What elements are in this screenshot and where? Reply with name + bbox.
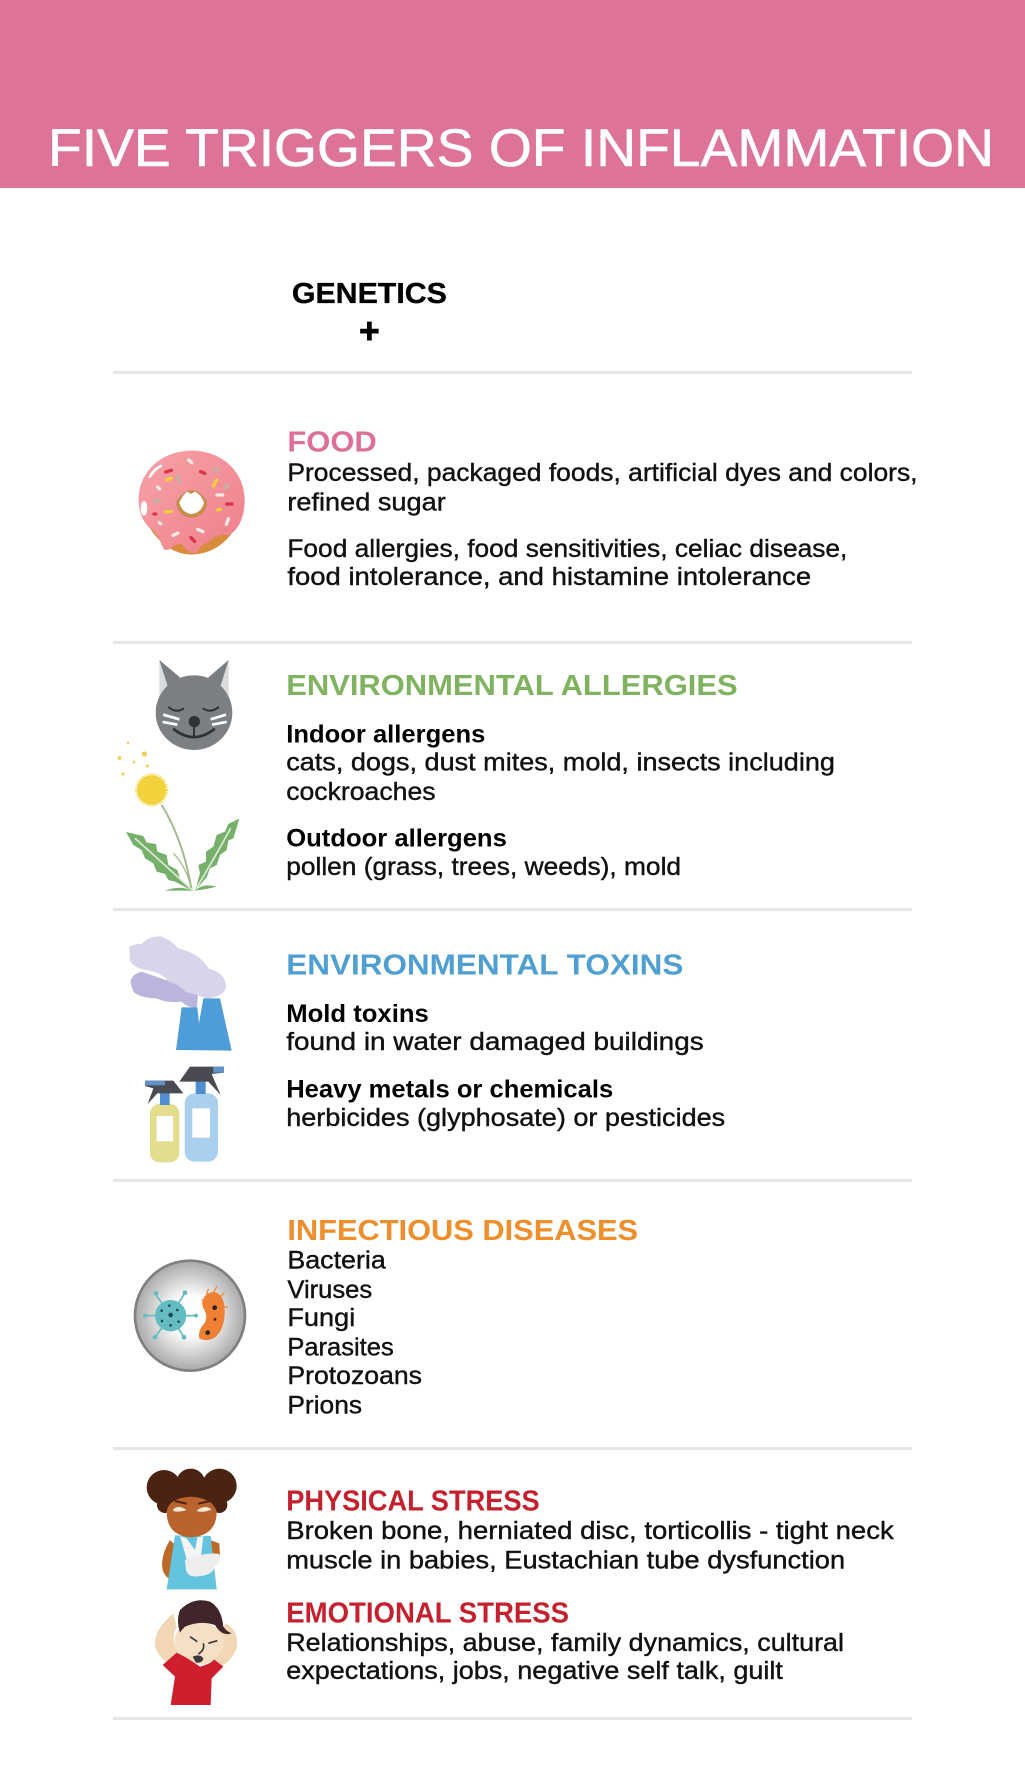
text: infectious diseases: Prions [287, 1391, 362, 1419]
icon: factory smoke [129, 936, 232, 1051]
text: physical stress: PHYSICAL STRESS [286, 1485, 540, 1517]
text: infectious diseases: Viruses [287, 1276, 372, 1304]
text: environmental toxins: found in water damaged buildings [286, 1028, 704, 1056]
text: infectious diseases [287, 1214, 638, 1419]
text: food: refined sugar [287, 488, 446, 516]
panel: physical stress [147, 1469, 894, 1589]
text: food: Processed, packaged foods, artificial dyes and colors, [287, 459, 918, 487]
icon: dandelion [117, 741, 239, 891]
text: infectious diseases: Bacteria [287, 1246, 386, 1274]
text: physical stress: Broken bone, herniated disc, torticollis - tight neck [286, 1517, 894, 1545]
text: emotional stress: expectations, jobs, negative self talk, guilt [286, 1657, 783, 1685]
icon: child with arm sling [147, 1469, 237, 1589]
text: environmental allergies: ENVIRONMENTAL ALLERGIES [286, 669, 738, 701]
icon: donut [139, 451, 245, 555]
text: food: Food allergies, food sensitivities, celiac disease, [287, 535, 847, 563]
text: environmental allergies: pollen (grass, trees, weeds), mold [286, 853, 681, 881]
text: infectious diseases: INFECTIOUS DISEASES [287, 1214, 638, 1246]
text: environmental toxins [286, 948, 725, 1132]
text: environmental toxins: herbicides (glyphosate) or pesticides [286, 1104, 725, 1132]
icon: cat [156, 660, 232, 750]
title: FIVE TRIGGERS OF INFLAMMATION [48, 119, 994, 178]
text: environmental allergies: cockroaches [286, 778, 436, 806]
text: emotional stress: EMOTIONAL STRESS [286, 1597, 569, 1629]
genetics heading [292, 277, 447, 351]
text: infectious diseases: Parasites [287, 1334, 394, 1362]
panel: environmental allergies [117, 660, 835, 891]
icon: microbes in petri dish [135, 1261, 245, 1371]
text: infectious diseases: Protozoans [287, 1362, 422, 1390]
text: environmental allergies: Indoor allergens [286, 720, 485, 748]
text: emotional stress: Relationships, abuse, family dynamics, cultural [286, 1629, 844, 1657]
text: food: food intolerance, and histamine intolerance [287, 563, 811, 591]
text: environmental allergies: Outdoor allergens [286, 824, 507, 852]
text: physical stress [286, 1485, 894, 1574]
text: infectious diseases: Fungi [287, 1304, 355, 1332]
text: environmental allergies: cats, dogs, dust mites, mold, insects including [286, 749, 835, 777]
icon: spray bottles [145, 1067, 224, 1162]
text: environmental toxins: Mold toxins [286, 1000, 429, 1028]
text: physical stress: muscle in babies, Eustachian tube dysfunction [286, 1546, 845, 1574]
text: environmental toxins: ENVIRONMENTAL TOXINS [286, 948, 683, 980]
genetics heading: GENETICS [292, 277, 447, 309]
panel: emotional stress [155, 1597, 844, 1705]
plus sign: + [359, 312, 380, 351]
text: food [287, 426, 918, 591]
text: emotional stress [286, 1597, 844, 1685]
text: food: FOOD [287, 426, 377, 458]
text: environmental allergies [286, 669, 835, 881]
panel: infectious diseases [135, 1214, 638, 1419]
icon: stressed person holding head [155, 1600, 237, 1705]
header band [0, 0, 1025, 188]
panel: environmental toxins [129, 936, 725, 1162]
panel: food [139, 426, 918, 591]
text: environmental toxins: Heavy metals or chemicals [286, 1076, 613, 1104]
